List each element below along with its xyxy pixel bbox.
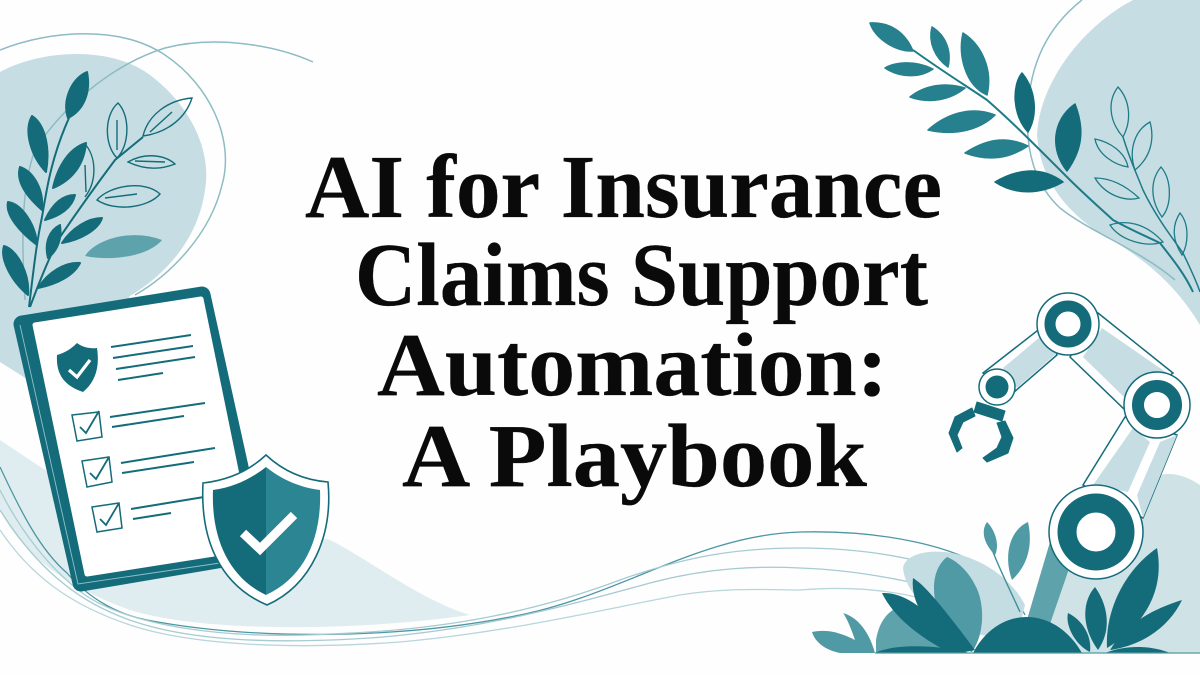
robot base trunk xyxy=(1021,542,1072,653)
tablet checkboxes xyxy=(72,411,122,532)
tablet edge highlight xyxy=(20,325,220,584)
title: A Playbook xyxy=(402,407,867,506)
gripper joint xyxy=(979,369,1015,405)
right foliage xyxy=(870,23,1200,292)
arm segment: right joint to base joint xyxy=(1083,417,1177,518)
large mid-tone leaf xyxy=(934,557,982,652)
flowing wave lines along bottom xyxy=(0,467,1025,646)
far left mid-tone leaf xyxy=(812,613,875,653)
dark leaves and mounds xyxy=(875,548,1182,653)
gripper claw xyxy=(949,402,1013,462)
top joint xyxy=(1037,293,1099,355)
tablet screen xyxy=(35,299,252,574)
mid tone mound xyxy=(876,605,950,653)
large shield with check xyxy=(203,455,329,605)
shield check mark xyxy=(243,515,294,549)
sprig with two leaves xyxy=(984,522,1030,612)
decorative thin curves: top left xyxy=(0,34,313,300)
left pale accent leaf xyxy=(85,235,162,258)
title: Claims Support xyxy=(355,226,928,325)
right joint xyxy=(1124,372,1190,438)
title: Automation: xyxy=(377,316,888,415)
background blob: bottom left xyxy=(0,440,470,627)
shield outer xyxy=(203,455,329,605)
right filled leaves xyxy=(870,23,1028,158)
background blob: top left xyxy=(0,54,206,400)
arm segment: top joint to right joint xyxy=(1070,313,1173,410)
left outlined leaves xyxy=(84,98,192,207)
pale hump behind robot base xyxy=(1036,474,1200,653)
decorative thin curve: top right xyxy=(1027,0,1175,280)
left filled leaves xyxy=(3,72,102,295)
base joint xyxy=(1049,485,1143,579)
bottom right plants xyxy=(812,522,1200,653)
left branch stems xyxy=(29,118,143,307)
arm segment: gripper to top joint xyxy=(983,327,1057,393)
tablet body xyxy=(22,295,259,583)
tablet text lines xyxy=(110,335,215,519)
ground line xyxy=(875,652,1200,654)
tablet shield badge xyxy=(57,343,98,392)
title: AI for Insurance xyxy=(305,138,942,237)
right dark leaves xyxy=(995,73,1081,192)
shield left half xyxy=(213,467,266,595)
shield right half xyxy=(266,467,320,595)
pale oval blob xyxy=(903,552,1025,636)
robotic arm xyxy=(949,293,1190,579)
right branch stems xyxy=(913,50,1200,292)
title xyxy=(305,138,942,506)
bottom right plant background xyxy=(876,474,1200,653)
right outlined leaves xyxy=(1095,87,1187,255)
left foliage xyxy=(3,72,192,307)
tablet with checklist xyxy=(20,295,259,584)
background blob: top right xyxy=(1037,0,1200,325)
